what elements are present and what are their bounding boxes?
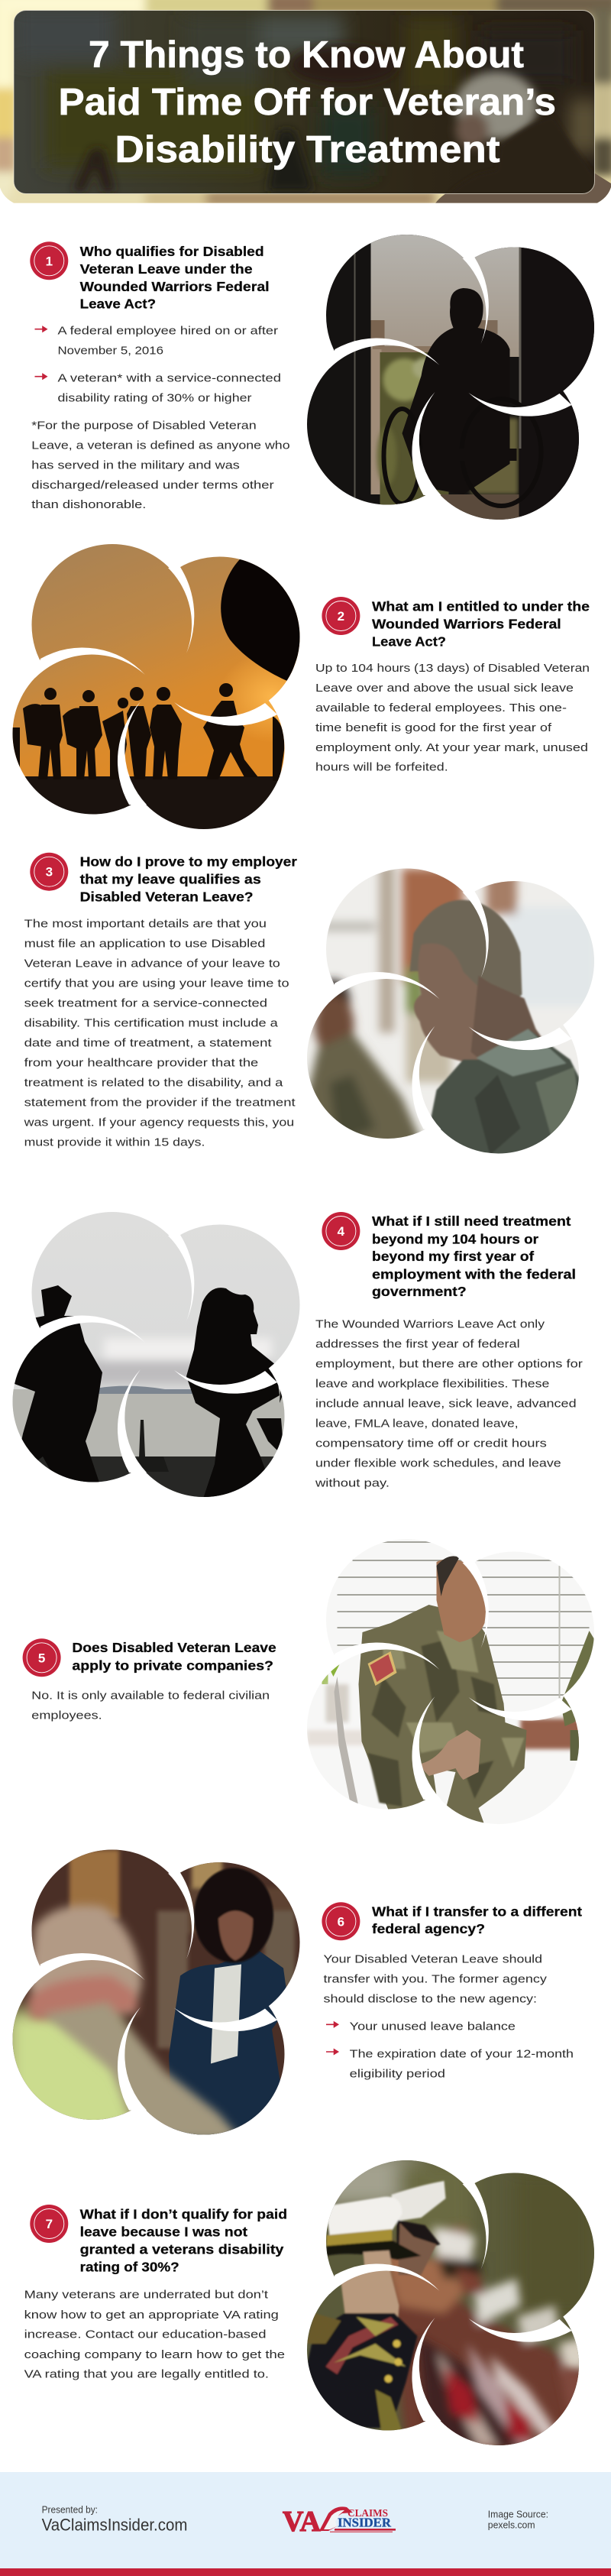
footnote	[31, 420, 290, 511]
bullet arrow	[35, 327, 47, 332]
photo cluster: veteran in profile	[307, 865, 600, 1166]
number badge 7: 7	[46, 2217, 53, 2231]
logo: VA Claims Insider: INSIDER	[338, 2516, 392, 2530]
body text 5	[31, 1690, 270, 1722]
number badge 5	[23, 1638, 61, 1677]
logo: VA Claims Insider: VA	[283, 2506, 322, 2538]
body text 2: available to federal employees. This one-	[315, 702, 567, 714]
body text 7	[24, 2289, 285, 2381]
presented by: Presented by:	[42, 2504, 98, 2516]
number badge 3	[30, 853, 68, 891]
body text 3	[23, 917, 296, 1149]
body text 7: VA rating that you are legally entitled to.	[24, 2368, 269, 2381]
number badge 1	[30, 241, 68, 280]
heading 6	[372, 1904, 582, 1936]
number badge 3: 3	[46, 865, 53, 880]
heading 6: What if I transfer to a different	[372, 1904, 582, 1919]
white crescent gaps	[35, 567, 277, 805]
footer background	[0, 2472, 611, 2568]
number badge 2	[322, 597, 360, 635]
footnote: than dishonorable.	[31, 498, 146, 511]
heading 7: granted a veterans disability	[80, 2241, 284, 2257]
bullet text: A veteran* with a service-connected	[58, 371, 281, 385]
body text 3: seek treatment for a service-connected	[24, 996, 267, 1009]
white crescent gaps	[330, 258, 571, 495]
heading 2: What am I entitled to under the	[372, 598, 590, 614]
image source: Image Source:	[488, 2508, 548, 2520]
image source: pexels.com	[488, 2519, 535, 2530]
heading 5	[72, 1640, 276, 1673]
heading 4: government?	[372, 1284, 467, 1299]
number badge 4: 4	[338, 1224, 345, 1239]
body text 3: statement from the provider if the treatment	[24, 1096, 296, 1109]
photo cluster: veteran in wheelchair at doorway	[307, 235, 597, 521]
heading 4: employment with the federal	[372, 1266, 576, 1282]
body text 2: time benefit is good for the first year of	[315, 721, 552, 734]
number badge 7	[30, 2205, 68, 2243]
bullet text: The expiration date of your 12-month	[350, 2048, 574, 2061]
body text 4: employment, but there are other options for	[315, 1357, 583, 1370]
body text 3: was urgent. If your agency requests this, you	[23, 1116, 294, 1129]
heading 3: that my leave qualifies as	[80, 872, 261, 887]
number badge 2: 2	[338, 609, 344, 624]
body text 4: leave and workplace flexibilities. These	[315, 1377, 549, 1390]
body text 7: coaching company to learn how to get the	[24, 2348, 285, 2361]
body text 2: employment only. At your year mark, unused	[315, 741, 588, 754]
heading 1: Wounded Warriors Federal	[80, 279, 270, 294]
heading 7: leave because I was not	[80, 2224, 247, 2239]
white crescent gaps	[35, 1872, 277, 2111]
body text 2	[315, 662, 590, 773]
panel: question 5	[23, 1539, 597, 1829]
bullet text	[350, 2048, 574, 2081]
heading 2	[372, 598, 590, 650]
heading 5: Does Disabled Veteran Leave	[72, 1640, 276, 1655]
heading 4: beyond my 104 hours or	[372, 1231, 538, 1246]
bullet text: A federal employee hired on or after	[58, 324, 278, 338]
body text 6	[324, 1953, 547, 2006]
heading 4	[372, 1213, 576, 1299]
body text 4: leave, FMLA leave, donated leave,	[315, 1417, 519, 1430]
photo cluster: soldiers walking by the sea	[12, 1212, 302, 1499]
body text 3: treatment is related to the disability, and a	[24, 1076, 283, 1089]
panel: question 2	[11, 544, 590, 831]
body text 4: compensatory time off or credit hours	[315, 1437, 547, 1450]
white crescent gaps	[330, 891, 571, 1129]
body text 7: increase. Contact our education-based	[24, 2328, 266, 2341]
body text 3: disability. This certification must include a	[24, 1016, 279, 1029]
heading 7: What if I don’t qualify for paid	[80, 2206, 287, 2221]
bullet text: disability rating of 30% or higher	[58, 391, 252, 405]
body text 2: Up to 104 hours (13 days) of Disabled Veteran	[315, 662, 590, 675]
body text 5: No. It is only available to federal civilian	[31, 1690, 270, 1703]
bullet text: Your unused leave balance	[350, 2020, 516, 2033]
body text 6: should disclose to the new agency:	[324, 1993, 537, 2006]
heading 1	[80, 244, 270, 312]
number badge 1: 1	[46, 254, 53, 268]
heading 1: Who qualifies for Disabled	[80, 244, 264, 259]
logo: VA Claims Insider: CLAIMS	[348, 2508, 388, 2519]
body text 5: employees.	[31, 1709, 102, 1722]
body text 4: without pay.	[315, 1476, 390, 1489]
bullet arrow	[35, 374, 47, 379]
number badge 6: 6	[338, 1914, 344, 1929]
photo cluster: woman listening to soldier	[5, 1849, 302, 2147]
heading 4: beyond my first year of	[372, 1249, 534, 1264]
body text 3: The most important details are that you	[24, 917, 267, 930]
panel: header banner	[0, 0, 611, 206]
bullet text: November 5, 2016	[58, 344, 163, 358]
heading 1: Veteran Leave under the	[80, 261, 253, 277]
white crescent gaps	[35, 1235, 277, 1473]
title	[58, 34, 556, 170]
bullet text	[58, 371, 281, 405]
body text 3: date and time of treatment, a statement	[24, 1036, 273, 1049]
title: Disability Treatment	[115, 129, 499, 170]
body text 4: The Wounded Warriors Leave Act only	[315, 1317, 545, 1330]
heading 6: federal agency?	[372, 1921, 485, 1936]
white crescent gaps	[330, 1562, 571, 1800]
image source	[488, 2508, 548, 2530]
body text 4: addresses the first year of federal	[315, 1337, 520, 1350]
panel: question 6	[5, 1849, 582, 2147]
body text 3: Veteran Leave in advance of your leave to	[24, 957, 280, 970]
body text 6: transfer with you. The former agency	[324, 1973, 547, 1986]
body text 2: Leave over and above the usual sick leave	[315, 682, 574, 695]
panel: question 1	[30, 235, 597, 521]
bullet text: eligibility period	[350, 2068, 445, 2081]
heading 2: Wounded Warriors Federal	[372, 617, 561, 632]
panel: question 7	[24, 2153, 601, 2451]
body text 7: know how to get an appropriate VA rating	[24, 2309, 279, 2322]
bullet arrow	[326, 2049, 338, 2054]
footnote: *For the purpose of Disabled Veteran	[31, 420, 257, 433]
heading 3	[80, 854, 297, 905]
body text 6: Your Disabled Veteran Leave should	[324, 1953, 542, 1966]
body text 4: include annual leave, sick leave, advanced	[315, 1397, 577, 1410]
panel: question 3	[23, 853, 601, 1166]
presented by: VaClaimsInsider.com	[42, 2516, 187, 2535]
footnote: Leave, a veteran is defined as anyone who	[31, 439, 290, 452]
body text 3: from your healthcare provider that the	[24, 1056, 258, 1069]
heading 7	[80, 2206, 287, 2274]
heading 4: What if I still need treatment	[372, 1213, 571, 1229]
panel: question 4	[12, 1212, 583, 1499]
photo cluster: saluting marines	[307, 2153, 600, 2451]
red footer bar	[0, 2568, 611, 2576]
heading 2: Leave Act?	[372, 634, 446, 650]
heading 3: How do I prove to my employer	[80, 854, 297, 869]
body text 3: must file an application to use Disabled	[24, 937, 265, 950]
footnote: has served in the military and was	[31, 458, 240, 471]
footnote: discharged/released under terms other	[31, 478, 274, 491]
presented by	[42, 2504, 187, 2535]
header photo background	[0, 0, 611, 206]
number badge 5: 5	[38, 1651, 45, 1665]
body text 4: under flexible work schedules, and leave	[315, 1456, 561, 1469]
heading 1: Leave Act?	[80, 296, 156, 312]
dark translucent title panel	[14, 8, 603, 206]
white crescent gaps	[330, 2183, 571, 2421]
panel: footer	[0, 2472, 611, 2576]
logo: VA Claims Insider	[283, 2506, 396, 2538]
number badge 4	[322, 1212, 360, 1250]
heading 5: apply to private companies?	[72, 1657, 273, 1673]
bullet text	[58, 324, 278, 358]
photo cluster: seated army soldier	[307, 1539, 597, 1829]
body text 4	[315, 1317, 583, 1489]
heading 3: Disabled Veteran Leave?	[80, 889, 254, 905]
body text 3: certify that you are using your leave time to	[24, 977, 289, 990]
number badge 6	[322, 1902, 360, 1940]
body text 3: must provide it within 15 days.	[24, 1136, 205, 1149]
body text 2: hours will be forfeited.	[315, 761, 448, 773]
title: Paid Time Off for Veteran’s	[58, 82, 556, 123]
bullet arrow	[326, 2022, 338, 2027]
body text 7: Many veterans are underrated but don’t	[24, 2289, 269, 2302]
heading 7: rating of 30%?	[80, 2259, 179, 2274]
title: 7 Things to Know About	[89, 34, 524, 76]
panel outline	[14, 11, 594, 194]
photo cluster: soldiers at sunset	[11, 544, 325, 831]
